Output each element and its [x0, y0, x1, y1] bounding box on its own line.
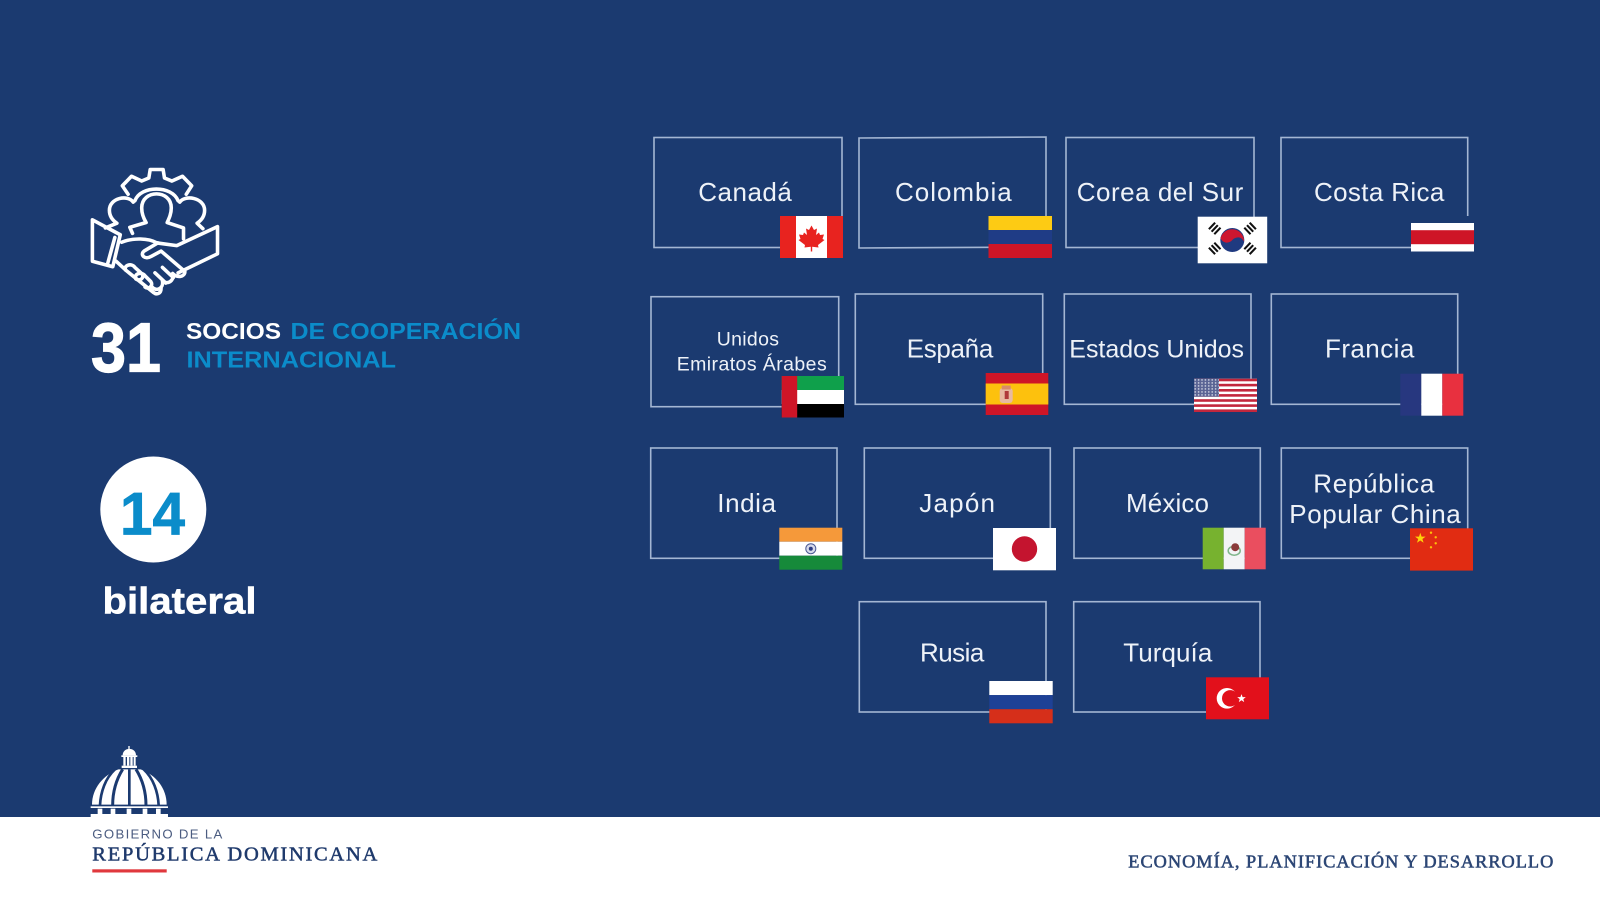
card: Estados Unidos	[1064, 294, 1257, 412]
heading: socios de cooperación internacional: INTERNACIONAL	[186, 347, 396, 373]
card: Canadá	[654, 138, 843, 258]
card: México: México	[1126, 488, 1209, 518]
heading: socios de cooperación internacional	[186, 317, 521, 373]
stat: 14 bilateral	[100, 456, 256, 621]
card: España: España	[907, 334, 994, 364]
stat: 31 socios: 31	[91, 309, 161, 387]
flag: UAE	[782, 376, 844, 418]
flag: Turkey	[1206, 677, 1269, 719]
icon: handshake with people and gear	[92, 169, 218, 294]
card: Turquía: Turquía	[1123, 638, 1213, 668]
card: Corea del Sur: Corea del Sur	[1077, 177, 1244, 207]
flag: Colombia	[988, 216, 1052, 258]
logo text: Gobierno de la República Dominicana: GOBIERNO DE LA	[92, 827, 223, 842]
logo: dome	[91, 746, 168, 817]
card: Turquía	[1074, 602, 1269, 719]
card: Estados Unidos: Estados Unidos	[1069, 336, 1244, 364]
flag: France	[1400, 374, 1463, 416]
flag: China	[1410, 528, 1473, 571]
stat: 14 bilateral: 14	[120, 480, 186, 547]
card: España	[855, 294, 1048, 415]
flag: Russia	[989, 681, 1053, 723]
flag: Mexico	[1203, 528, 1266, 569]
flag: USA	[1194, 379, 1257, 412]
stat: 14 bilateral: bilateral	[102, 580, 256, 621]
footer band	[0, 817, 1600, 900]
card: Rusia	[859, 602, 1053, 723]
card: India	[651, 448, 842, 570]
flag: Costa Rica	[1411, 216, 1474, 258]
card: Corea del Sur	[1066, 138, 1267, 263]
stat: 31 socios	[91, 309, 521, 387]
flag: Japan	[993, 528, 1056, 570]
card: Japón	[864, 448, 1056, 570]
card: Costa Rica	[1281, 138, 1474, 258]
card: República Popular China: Popular China	[1289, 499, 1461, 529]
heading: socios de cooperación internacional: SOCIOS	[186, 318, 281, 344]
card: Emiratos Árabes Unidos: Unidos	[717, 329, 779, 351]
card: Emiratos Árabes Unidos: Emiratos Árabes	[677, 353, 827, 376]
card: Rusia: Rusia	[920, 638, 985, 668]
logo text: Gobierno de la República Dominicana: REPÚBLICA DOMINICANA	[92, 841, 377, 865]
flag: South Korea	[1198, 217, 1267, 263]
card: Emiratos Árabes Unidos	[651, 297, 844, 418]
card: República Popular China: República	[1313, 469, 1435, 499]
card: Francia: Francia	[1325, 334, 1415, 364]
heading: socios de cooperación internacional: DE COOPERACIÓN	[290, 317, 521, 344]
card: Japón: Japón	[919, 488, 995, 518]
flag: Canada	[780, 216, 843, 258]
logo text: Gobierno de la República Dominicana	[92, 827, 377, 872]
card: Francia	[1271, 294, 1463, 416]
card: República Popular China	[1281, 448, 1473, 571]
card: México	[1074, 448, 1266, 569]
card: India: India	[717, 488, 777, 518]
flag: Spain	[986, 373, 1048, 415]
card: Colombia	[859, 137, 1052, 258]
card: Canadá: Canadá	[698, 177, 792, 207]
flag: India	[779, 528, 842, 570]
footer text: ministry: ECONOMÍA, PLANIFICACIÓN Y DESARROLLO	[1128, 850, 1553, 871]
card: Costa Rica: Costa Rica	[1314, 177, 1445, 207]
card: Colombia: Colombia	[895, 177, 1012, 207]
